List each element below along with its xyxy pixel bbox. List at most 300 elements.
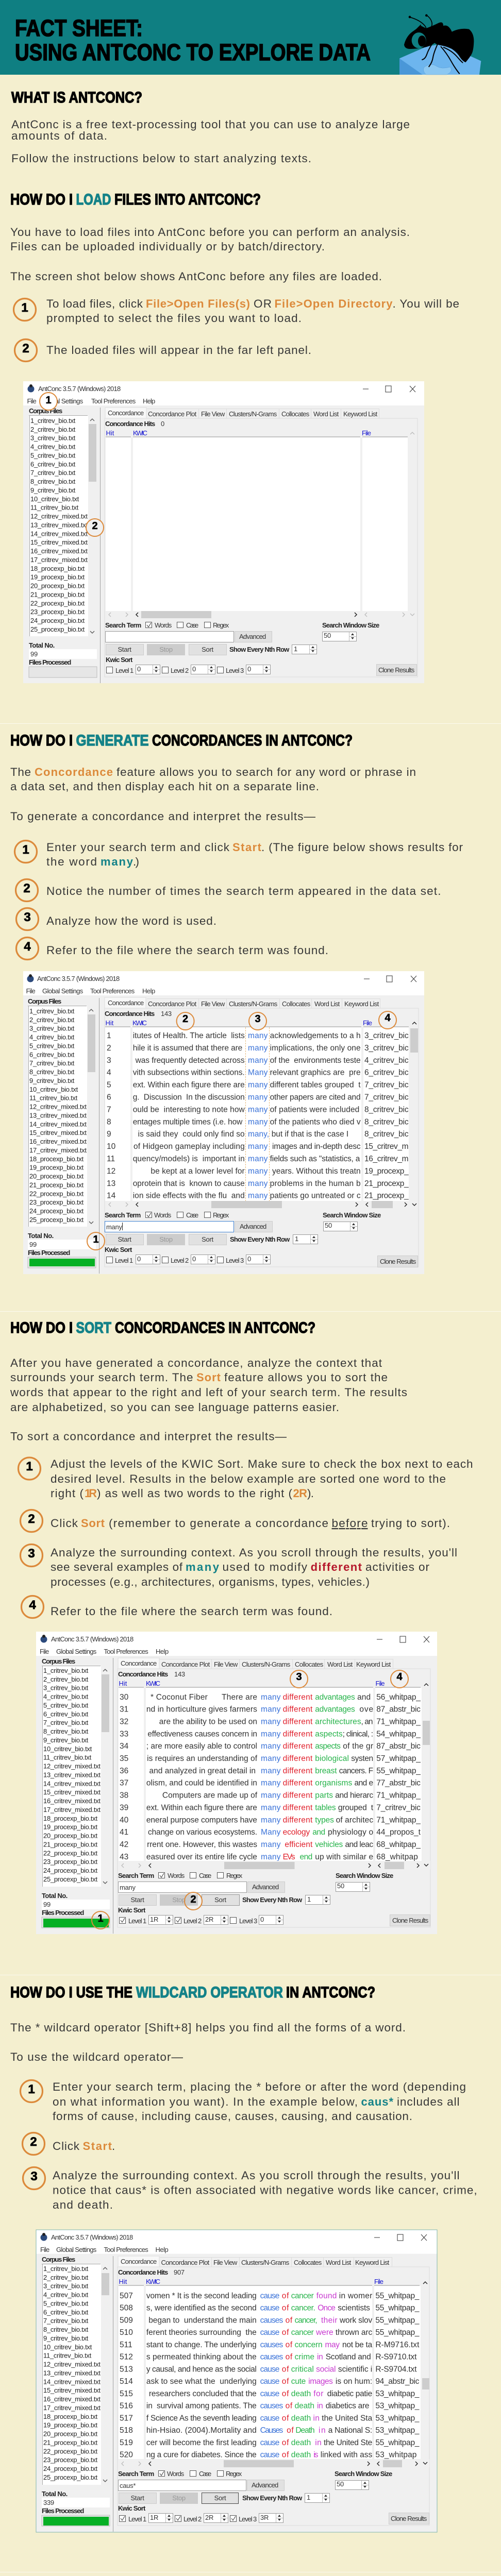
- generate intro text: feature allows you to search for any word or phrase in: [116, 766, 416, 778]
- search controls: 2R: [205, 2514, 213, 2521]
- corpus files panel: 2_critrev_bio.txt: [43, 1675, 89, 1683]
- corpus files panel: 16_critrev_mixed.txt: [43, 1797, 101, 1805]
- concordance results table: thrown arc: [336, 2328, 372, 2337]
- window title bar: AntConc 3.5.7 (Windows) 2018: [51, 2233, 133, 2241]
- search controls: 50: [337, 1882, 344, 1890]
- concordance results table: of: [282, 2450, 289, 2460]
- concordance results table: Hit: [119, 1680, 127, 1687]
- corpus files panel: 19_procexp_bio.txt: [43, 1823, 97, 1831]
- concordance results table: ion side effects with the flu and: [133, 1192, 245, 1200]
- concordance results table: many: [261, 1705, 281, 1714]
- menu bar: Help: [156, 2246, 169, 2253]
- concordance results table: many: [261, 1730, 281, 1738]
- concordance results table: different: [283, 1730, 313, 1738]
- concordance results table: ext. Within each figure there are: [133, 1081, 245, 1090]
- tab bar: Keyword List: [344, 1000, 379, 1008]
- heading: GENERATE: [76, 732, 148, 749]
- concordance results table: 907: [174, 2268, 185, 2276]
- corpus files panel: 22_procexp_bio.txt: [29, 1190, 84, 1197]
- corpus files panel: 25_procexp_bio.txt: [30, 625, 85, 633]
- concordance results table: 9: [107, 1130, 111, 1139]
- tab bar: Concordance: [121, 1659, 157, 1667]
- concordance results table: 507: [120, 2292, 133, 2300]
- heading: FILES INTO ANTCONC?: [114, 191, 261, 208]
- corpus files panel: 2_critrev_bio.txt: [29, 1016, 75, 1024]
- search controls: Search Term: [118, 2470, 154, 2478]
- screenshot: AntConc sorted concordance: [36, 1632, 437, 1934]
- concordance results table: the United Sta: [322, 2414, 373, 2422]
- corpus files panel: 14_critrev_mixed.txt: [43, 2378, 101, 2385]
- callout 1: 1: [93, 1234, 99, 1245]
- search controls: Sort: [202, 646, 214, 653]
- tab bar: Concordance Plot: [161, 1660, 210, 1668]
- step 1: 1R: [85, 1487, 97, 1500]
- concordance results table: 71_whitpap_: [376, 1718, 421, 1726]
- concordance results table: 513: [120, 2365, 133, 2374]
- concordance results table: for: [313, 2389, 323, 2398]
- search controls: Sort: [214, 1896, 227, 1904]
- search controls: Level 1: [115, 667, 133, 674]
- corpus files panel: 19_procexp_bio.txt: [43, 2421, 97, 2429]
- concordance results table: KWIC: [146, 1680, 160, 1687]
- corpus files panel: 10_critrev_bio.txt: [30, 495, 79, 503]
- corpus files panel: 12_critrev_mixed.txt: [30, 513, 88, 520]
- concordance results table: images and in-depth desc: [272, 1142, 361, 1151]
- concordance results table: different: [283, 1754, 313, 1763]
- concordance results table: many: [248, 1056, 268, 1065]
- concordance results table: cancer: [291, 2328, 314, 2337]
- concordance results table: 71_whitpap_: [376, 1816, 421, 1824]
- concordance results table: were: [315, 2328, 333, 2337]
- corpus files panel: 22_procexp_bio.txt: [30, 599, 85, 607]
- callout 2: 2: [182, 1013, 188, 1025]
- concordance results table: Causes: [260, 2426, 283, 2435]
- search controls: Level 2: [183, 2515, 202, 2523]
- corpus files panel: Files Processed: [42, 2507, 84, 2515]
- sort intro text: words that appear to the right and left of your search term. The results: [10, 1386, 407, 1399]
- search controls: 1R: [150, 1916, 158, 1923]
- step 1: . (The figure below shows results for: [261, 841, 463, 854]
- concordance results table: EVs: [283, 1853, 295, 1861]
- concordance results table: 21_procexp_: [364, 1179, 409, 1188]
- menu bar: Tool Preferences: [104, 2246, 148, 2253]
- concordance results table: 520: [120, 2450, 133, 2460]
- step 2: (remember to generate a concordance: [109, 1517, 328, 1530]
- corpus files panel: 2_critrev_bio.txt: [30, 426, 76, 433]
- concordance results table: 13: [107, 1179, 115, 1188]
- screenshot: AntConc window before loading: [23, 381, 424, 683]
- callout 1: [87, 1232, 105, 1250]
- step 3: [23, 2167, 477, 2211]
- menu bar: Tool Preferences: [91, 397, 136, 405]
- concordance results table: vith subsections within sections.: [133, 1069, 245, 1077]
- step 1: [19, 1458, 473, 1500]
- concordance results table: end: [300, 1853, 312, 1861]
- concordance results table: of architec: [336, 1816, 373, 1824]
- corpus files panel: Total No.: [42, 2490, 68, 2498]
- step 1: right (: [51, 1487, 84, 1500]
- concordance results table: 68_whitpap: [376, 1853, 418, 1861]
- corpus files panel: 14_critrev_mixed.txt: [43, 1780, 101, 1787]
- menu bar: File: [40, 2246, 49, 2253]
- concordance results table: of the environments teste: [270, 1056, 361, 1065]
- concordance results table: 36: [120, 1767, 128, 1775]
- panel: how to generate concordances: [10, 732, 463, 959]
- corpus files panel: 20_procexp_bio.txt: [30, 582, 85, 590]
- step 3: [21, 1545, 457, 1588]
- corpus files panel: 25_procexp_bio.txt: [43, 1875, 97, 1883]
- step 1: To load files, click: [46, 297, 143, 310]
- tab bar: Keyword List: [343, 410, 378, 418]
- concordance results table: different: [283, 1816, 313, 1824]
- corpus files panel: 20_procexp_bio.txt: [43, 1832, 97, 1840]
- concordance results table: 8_critrev_bic: [364, 1105, 409, 1114]
- step 3: Analyze how the word is used.: [46, 914, 216, 927]
- heading: [10, 191, 261, 208]
- concordance results table: olism, and could be identified in: [146, 1779, 257, 1788]
- concordance results area: File: [362, 429, 371, 437]
- concordance results table: many: [261, 1791, 281, 1800]
- concordance results table: 33: [120, 1730, 128, 1738]
- search controls: 1: [294, 645, 297, 653]
- search controls: Stop: [159, 646, 173, 653]
- tab bar: Concordance Plot: [148, 410, 197, 418]
- tab bar: Clusters/N-Grams: [229, 410, 277, 418]
- corpus files panel: 21_procexp_bio.txt: [43, 1840, 97, 1848]
- step 1: Start: [232, 841, 262, 854]
- concordance results table: 19_procexp_: [364, 1167, 409, 1176]
- concordance results table: Computers are made up of: [162, 1791, 258, 1800]
- search controls: 0: [192, 665, 196, 673]
- concordance results table: vomen * It is the second leading: [146, 2292, 257, 2300]
- search controls: Clone Results: [391, 2515, 427, 2522]
- menu bar: Help: [142, 987, 155, 995]
- heading: CONCORDANCES IN ANTCONC?: [152, 732, 353, 749]
- concordance results table: 508: [120, 2304, 133, 2313]
- concordance results table: aspects: [315, 1742, 341, 1751]
- step 1: 1: [22, 843, 29, 857]
- search controls: Words: [168, 1872, 185, 1879]
- concordance results table: many: [261, 1816, 281, 1824]
- concordance results table: 10: [107, 1142, 116, 1151]
- step 1: 1: [28, 2082, 35, 2096]
- concordance results table: relevant graphics are pre: [270, 1069, 361, 1077]
- concordance results table: of: [282, 2377, 289, 2386]
- concordance results table: of: [282, 2365, 289, 2374]
- callout 4: [391, 1670, 408, 1688]
- corpus files panel: 15_critrev_mixed.txt: [43, 2386, 101, 2394]
- concordance results table: Hit: [105, 1019, 114, 1027]
- load intro text: [10, 226, 410, 283]
- concordance results table: diabetics are: [326, 2402, 369, 2411]
- menu bar: File: [27, 397, 37, 405]
- screenshot: AntConc wildcard results for caus*: [36, 2230, 437, 2532]
- search controls: Case: [199, 1872, 211, 1879]
- panel: how to use the wildcard operator: [10, 1984, 477, 2211]
- concordance results table: of Hidgeon gameplay including: [133, 1142, 245, 1151]
- concordance results table: 4_critrev_bic: [364, 1056, 409, 1065]
- heading: [10, 732, 353, 749]
- search controls: Start: [118, 646, 131, 653]
- search controls: Regex: [213, 1211, 229, 1219]
- concordance results table: social: [316, 2365, 336, 2374]
- concordance results table: images: [308, 2377, 333, 2386]
- search controls: Level 3: [226, 1257, 244, 1264]
- search controls: 0: [247, 665, 251, 673]
- concordance results table: the United Ste: [324, 2438, 372, 2447]
- corpus files panel: Corpus Files: [29, 407, 62, 415]
- search controls: Show Every Nth Row: [230, 1235, 290, 1243]
- corpus files panel: 1_critrev_bio.txt: [30, 417, 76, 425]
- tab bar: [118, 1658, 430, 1927]
- menu bar: Help: [156, 1648, 169, 1655]
- step 1: Adjust the levels of the KWIC Sort. Make sure to check the box next to each: [51, 1458, 473, 1470]
- corpus files panel: 24_procexp_bio.txt: [30, 617, 85, 624]
- search controls: Search Term: [105, 1211, 141, 1219]
- heading: CONCORDANCES IN ANTCONC?: [115, 1319, 315, 1336]
- concordance results table: File: [375, 1680, 385, 1687]
- step 2: 2: [23, 882, 30, 895]
- search controls: Level 2: [171, 667, 189, 674]
- concordance results table: cause: [260, 2304, 279, 2313]
- concordance results table: 53_whitpap: [375, 2450, 416, 2460]
- concordance results table: 21_procexp_: [364, 1192, 409, 1200]
- step 4: [22, 1596, 332, 1618]
- search controls: Show Every Nth Row: [242, 2494, 303, 2502]
- concordance results table: 53_whitpap_: [375, 2414, 420, 2422]
- search controls: Kwic Sort: [105, 1246, 132, 1253]
- search controls: Level 2: [183, 1917, 202, 1925]
- intro text: AntConc is a free text-processing tool that you can use to analyze large: [11, 118, 410, 131]
- concordance results table: of: [282, 2414, 289, 2422]
- concordance results table: [105, 1010, 418, 1209]
- concordance results table: and: [312, 1828, 325, 1837]
- search controls: 1: [295, 1235, 298, 1243]
- concordance results table: 55_whitpap_: [375, 2292, 420, 2300]
- step 1: Enter your search term, placing the * before or after the word (depending: [53, 2080, 466, 2093]
- search controls: Level 2: [171, 1257, 189, 1264]
- concordance results table: 7_critrev_bic: [364, 1093, 409, 1101]
- concordance results table: of: [286, 2316, 293, 2325]
- heading: HOW DO I USE THE: [10, 1984, 132, 2001]
- concordance results table: 41: [120, 1828, 128, 1837]
- search controls: Level 3: [226, 667, 244, 674]
- corpus files panel: 11_critrev_bio.txt: [30, 504, 79, 512]
- concordance results table: 32: [120, 1718, 128, 1726]
- step 3: different: [311, 1561, 362, 1573]
- menu bar: [27, 397, 155, 405]
- search controls: many: [120, 1884, 136, 1891]
- concordance results table: 8_critrev_bic: [364, 1130, 409, 1139]
- corpus files panel: 22_procexp_bio.txt: [43, 1849, 97, 1857]
- concordance results table: many: [248, 1081, 268, 1090]
- corpus files panel: 6_critrev_bio.txt: [43, 2308, 89, 2316]
- concordance results table: different: [283, 1742, 313, 1751]
- corpus files panel: 10_critrev_bio.txt: [29, 1086, 78, 1093]
- corpus files panel: 9_critrev_bio.txt: [43, 1736, 89, 1744]
- corpus files panel: [42, 2256, 113, 2532]
- concordance results table: 87_abstr_bic: [376, 1705, 421, 1714]
- concordance results table: advantages: [315, 1705, 355, 1714]
- corpus files panel: 13_critrev_mixed.txt: [43, 2369, 101, 2377]
- tab bar: Word List: [327, 1660, 353, 1668]
- corpus files panel: 15_critrev_mixed.txt: [30, 538, 88, 546]
- concordance results area: [105, 420, 414, 618]
- concordance results table: parts: [315, 1791, 333, 1800]
- concordance results table: many: [261, 1718, 281, 1726]
- search controls: Search Term: [118, 1872, 154, 1879]
- concordance results table: many: [261, 1840, 281, 1849]
- intro text: [11, 118, 410, 165]
- concordance results table: s permeated thinking about the: [146, 2353, 257, 2362]
- concordance results table: different: [283, 1693, 313, 1702]
- concordance results table: of: [282, 2292, 289, 2300]
- step 1: File>Open Directory: [274, 297, 393, 310]
- corpus files panel: 25_procexp_bio.txt: [43, 2473, 97, 2481]
- concordance results table: 87_abstr_bic: [376, 1742, 421, 1751]
- corpus files panel: 6_critrev_bio.txt: [30, 460, 76, 468]
- concordance results table: many: [248, 1167, 268, 1176]
- step 1: 2R: [293, 1487, 307, 1500]
- corpus files panel: 99: [30, 650, 38, 658]
- corpus files panel: 9_critrev_bio.txt: [29, 1077, 75, 1084]
- menu bar: File: [26, 987, 36, 995]
- concordance results table: Death: [295, 2426, 315, 2435]
- step 2: Start: [82, 2140, 112, 2153]
- concordance results table: 53_whitpap_: [375, 2389, 420, 2398]
- corpus files panel: [29, 407, 100, 683]
- concordance results table: and e: [355, 1779, 373, 1788]
- corpus files panel: 17_critrev_mixed.txt: [43, 2404, 101, 2412]
- concordance results table: 3: [107, 1056, 111, 1065]
- window title bar: [40, 2233, 427, 2241]
- step 2: .: [112, 2140, 115, 2153]
- intro text: Follow the instructions below to start analyzing texts.: [11, 152, 311, 165]
- concordance results table: cancer: [291, 2292, 314, 2300]
- concordance results table: different: [283, 1705, 313, 1714]
- concordance results table: 2: [107, 1044, 111, 1053]
- step 1: 1: [21, 301, 28, 315]
- concordance results table: are the ability to be used on: [159, 1718, 257, 1726]
- corpus files panel: 11_critrev_bio.txt: [43, 1754, 92, 1761]
- panel: how to sort concordances: [10, 1319, 473, 1618]
- concordance results table: 55_whitpap_: [375, 2438, 420, 2447]
- concordance results table: change on various ecosystems.: [148, 1828, 257, 1837]
- concordance results table: of: [286, 2353, 293, 2362]
- search controls: 0: [247, 1255, 251, 1263]
- tab bar: [118, 2256, 429, 2526]
- corpus files panel: 5_critrev_bio.txt: [43, 1701, 89, 1709]
- tab bar: File View: [213, 2259, 238, 2266]
- concordance results table: 56_whitpap_: [376, 1693, 421, 1702]
- corpus files panel: 8_critrev_bio.txt: [30, 478, 76, 485]
- search controls: Advanced: [252, 2481, 278, 2489]
- concordance results table: 43: [120, 1853, 128, 1861]
- concordance results table: 42: [120, 1840, 128, 1849]
- corpus files panel: 10_critrev_bio.txt: [43, 1745, 92, 1753]
- search controls: Stop: [172, 1896, 186, 1904]
- concordance results table: 4: [107, 1069, 111, 1077]
- concordance results table: causes: [260, 2402, 283, 2411]
- tab bar: File View: [214, 1660, 238, 1668]
- corpus files panel: 1_critrev_bio.txt: [29, 1007, 75, 1015]
- concordance results table: in womer: [339, 2292, 372, 2300]
- search controls: Level 3: [239, 2515, 257, 2523]
- corpus files panel: 339: [43, 2499, 54, 2506]
- search controls: Advanced: [239, 633, 266, 640]
- tab bar: Concordance: [108, 999, 144, 1007]
- corpus files panel: 23_procexp_bio.txt: [43, 1858, 97, 1866]
- concordance results table: is said they could only find so: [138, 1130, 245, 1139]
- concordance results table: cause: [260, 2414, 279, 2422]
- corpus files panel: Files Processed: [42, 1909, 84, 1917]
- concordance results table: 11: [107, 1155, 115, 1163]
- concordance results table: began to understand the main: [148, 2316, 257, 2325]
- generate intro text: Concordance: [35, 766, 113, 778]
- concordance results table: 7: [107, 1105, 111, 1114]
- tab bar: Word List: [313, 410, 339, 418]
- corpus files panel: 6_critrev_bio.txt: [43, 1710, 89, 1718]
- search controls: 50: [325, 1222, 332, 1229]
- panel: how to load files: [10, 191, 459, 362]
- concordance results table: and hierarc: [335, 1791, 373, 1800]
- concordance results area: Hit: [106, 429, 114, 437]
- search controls: Search Window Size: [335, 2470, 392, 2478]
- concordance results table: is: [313, 2450, 319, 2460]
- search controls: 50: [337, 2480, 344, 2488]
- load intro text: The screen shot below shows AntConc before any files are loaded.: [10, 270, 382, 283]
- concordance results table: acknowledgements to a h: [270, 1031, 361, 1040]
- search controls: Search Window Size: [323, 1211, 381, 1219]
- concordance results table: 7_critrev_bic: [376, 1803, 421, 1812]
- concordance results table: 68_whitpap_: [376, 1840, 421, 1849]
- menu bar: [40, 2246, 169, 2253]
- concordance results table: advantages: [315, 1693, 355, 1702]
- menu bar: [40, 1648, 169, 1655]
- tab bar: Keyword List: [355, 2259, 390, 2266]
- corpus files panel: 6_critrev_bio.txt: [29, 1050, 75, 1058]
- concordance results table: 15_critrev_m: [364, 1142, 409, 1151]
- corpus files panel: 18_procexp_bio.txt: [43, 2413, 97, 2420]
- step 2: The loaded files will appear in the far left panel.: [46, 344, 311, 357]
- tab bar: File View: [201, 410, 225, 418]
- corpus files panel: 17_critrev_mixed.txt: [30, 556, 88, 564]
- concordance results table: causes: [260, 2353, 283, 2362]
- tab bar: Collocates: [294, 2259, 322, 2266]
- tab bar: Concordance: [121, 2258, 157, 2265]
- concordance results table: death: [295, 2402, 314, 2411]
- sort intro text: To sort a concordance and interpret the results—: [10, 1430, 287, 1443]
- concordance results table: 30: [120, 1693, 129, 1702]
- corpus files panel: 17_critrev_mixed.txt: [29, 1146, 87, 1154]
- concordance results table: 55_whitpap_: [375, 2328, 420, 2337]
- step 3: used to modify: [223, 1561, 308, 1573]
- search controls: Advanced: [252, 1883, 279, 1891]
- concordance results table: 7_critrev_bic: [364, 1081, 409, 1090]
- icon: AntConc ant on blue base: [399, 14, 481, 75]
- menu bar: Global Settings: [42, 397, 84, 405]
- search controls: 1: [307, 2494, 310, 2501]
- concordance results table: of the patients who died v: [270, 1117, 361, 1126]
- concordance results table: 34: [120, 1742, 129, 1751]
- concordance results table: different: [283, 1767, 313, 1775]
- search controls: Level 1: [128, 1917, 146, 1925]
- search controls: Regex: [213, 621, 229, 629]
- concordance results table: grouped t: [338, 1803, 374, 1812]
- title: [15, 15, 371, 65]
- corpus files panel: 8_critrev_bio.txt: [43, 1727, 89, 1735]
- corpus files panel: 23_procexp_bio.txt: [29, 1198, 84, 1206]
